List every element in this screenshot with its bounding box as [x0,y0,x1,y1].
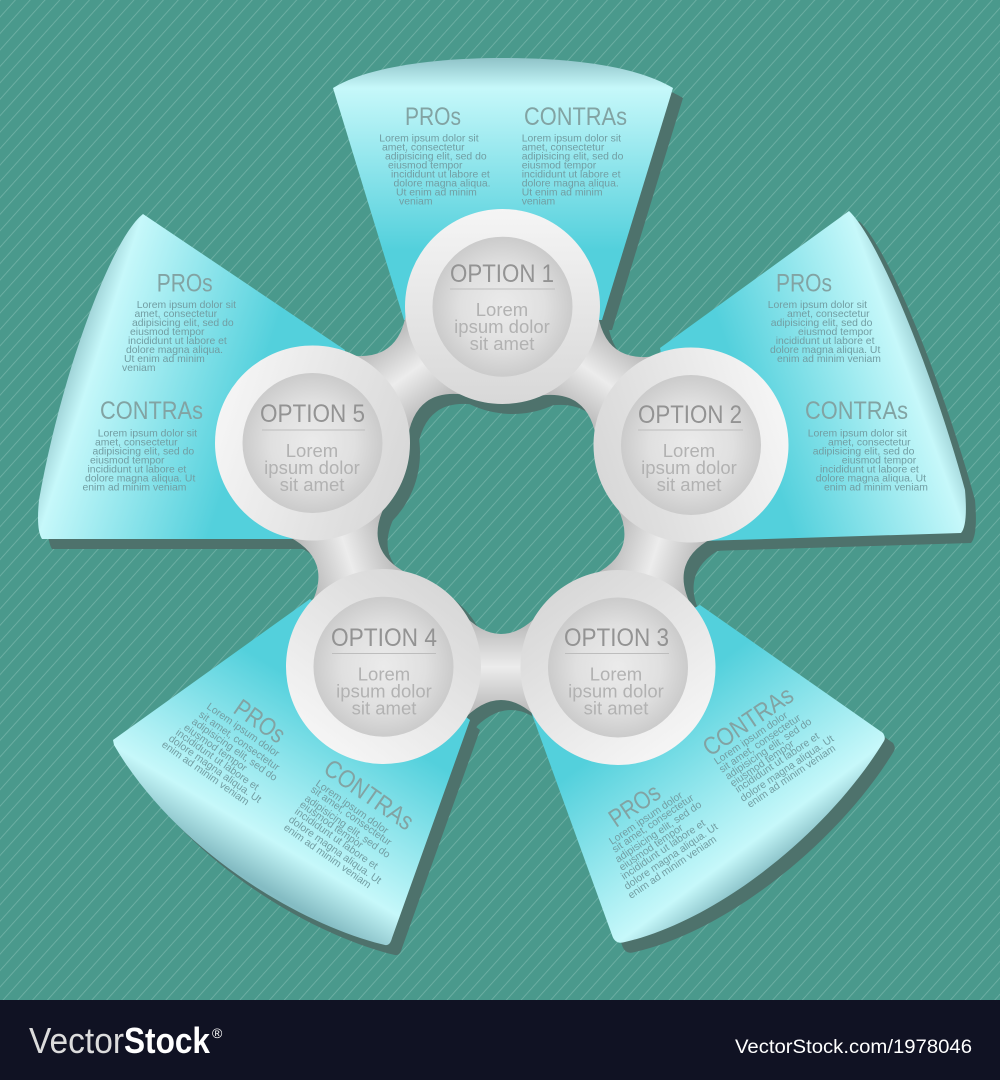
text: option 3 description: sit amet [584,698,648,718]
text: pros body [159,701,282,808]
footer bar [0,1000,1000,1080]
text: pros body: amet, consectetur [134,309,218,320]
text: contras body: enim ad minim veniam [281,822,373,891]
text: pros body: dolore magna aliqua. Ut [166,733,263,806]
text: contras body: veniam [522,197,555,208]
text: contras body: Lorem ipsum dolor sit [522,134,621,145]
text: pros body: incididunt ut labore et [173,727,261,793]
text: contras body: enim ad minim veniam [746,743,838,810]
text: contras body: eiusmod tempor [842,456,917,467]
panel: option 1 pros and contras [333,58,673,320]
text: contras body [808,429,928,494]
text: pros body: enim ad minim veniam [159,739,251,808]
text: pros body: adipisicing elit, sed do [132,318,234,329]
text: pros body [768,300,881,365]
text: pros body: incididunt ut labore et [776,336,875,347]
text: option 4 description: ipsum dolor [336,680,432,702]
text: option 4 description: sit amet [352,698,416,718]
text: contras body: enim ad minim veniam [824,483,928,494]
heading: contras: CONTRAs [698,681,799,762]
text: contras body: eiusmod tempor [90,456,165,467]
text: option 2 description: ipsum dolor [641,457,737,478]
text: contras body: dolore magna aliqua. Ut [739,734,836,804]
text: pros body: dolore magna aliqua. Ut [770,345,880,356]
text: contras body: dolore magna aliqua. Ut [85,474,195,485]
connectors between option circles [283,307,719,722]
text: pros body: Ut enim ad minim [396,188,477,199]
text: contras body: amet, consectetur [828,438,911,449]
text: option 5 description: Lorem [286,440,338,461]
text: contras body [281,778,394,891]
text: pros body: incididunt ut labore et [391,170,490,181]
heading: contras: CONTRAs [319,754,419,836]
text: contras body: dolore magna aliqua. [522,179,619,190]
heading: pros: PROs [405,103,461,131]
panel: option 4 pros and contras [113,599,470,945]
text: pros body [122,300,236,374]
text: contras body: dolore magna aliqua. Ut [286,814,383,887]
text: option 5 description: ipsum dolor [264,457,360,478]
text: contras body: adipisicing elit, sed do [724,716,814,782]
text: pros body: adipisicing elit, sed do [614,799,704,865]
text: pros body: enim ad minim veniam [627,834,719,901]
panel: option 2 pros and contras [660,211,966,541]
label: option 3: OPTION 3 [564,624,669,652]
text: pros body: adipisicing elit, sed do [385,152,487,163]
option 3 circle [482,531,754,804]
text: pros body: dolore magna aliqua. [394,179,491,190]
heading: contras: CONTRAs [524,103,627,131]
text: pros body: enim ad minim veniam [777,354,881,365]
heading: contras: CONTRAs [100,397,203,425]
option 4 circle [247,530,520,803]
text: option 4 description [336,664,432,718]
heading: contras: CONTRAs [805,397,908,425]
text: pros body: eiusmod tempor [388,161,463,172]
text: option 1 description: sit amet [470,333,534,354]
text: contras body: adipisicing elit, sed do [92,447,194,458]
label: option 4: OPTION 4 [331,624,437,652]
text: pros body: amet, consectetur [382,143,465,154]
label: option 5: OPTION 5 [260,400,365,428]
text: pros body: Lorem ipsum dolor sit [768,300,867,311]
text: contras body: dolore magna aliqua. Ut [816,474,926,485]
text: option 2 description: sit amet [657,474,721,495]
text: option 1 description [454,299,550,354]
text: option 3 description: Lorem [590,664,642,684]
text: pros body: eiusmod tempor [181,722,249,774]
text: contras body: incididunt ut labore et [522,170,621,181]
text: contras body [522,134,624,208]
drop shadows [48,68,976,955]
text: contras body: Lorem ipsum dolor [313,778,391,837]
text: contras body: Ut enim ad minim [522,188,603,199]
text: contras body: eiusmod tempor [729,738,797,789]
text: pros body: Lorem ipsum dolor [608,790,685,847]
text: option 1 description: ipsum dolor [454,316,550,337]
text: option 3 description: ipsum dolor [568,680,664,702]
text: pros body: sit amet, consectetur [196,709,282,774]
text: pros body: veniam [122,363,156,374]
panel: option 3 pros and contras [525,605,885,943]
image id: VectorStock.com/1978046 [735,1036,972,1058]
text: contras body: sit amet, consectetur [718,712,804,775]
text: option 4 description: Lorem [358,664,410,684]
text: option 3 description [568,664,664,718]
text: pros body: amet, consectetur [787,309,870,320]
text: option 5 description: sit amet [280,474,344,495]
logo: VectorStock: Vector [29,1020,124,1061]
text: contras body: incididunt ut labore et [820,465,919,476]
logo: VectorStock: Stock [124,1020,211,1061]
text: option 2 description [641,440,737,495]
text: pros body: Lorem ipsum dolor [204,701,282,760]
heading: pros: PROs [229,694,290,749]
text: pros body: adipisicing elit, sed do [189,716,279,784]
text: contras body [82,429,197,494]
text: contras body: incididunt ut labore et [88,465,186,476]
label: option 2: OPTION 2 [638,401,742,429]
text: contras body [713,710,838,810]
text: contras body: eiusmod tempor [522,161,597,172]
label: option 1: OPTION 1 [450,260,554,288]
text: contras body: adipisicing elit, sed do [522,152,624,163]
text: pros body: eiusmod tempor [130,327,205,338]
text: pros body: dolore magna aliqua. Ut [623,822,720,892]
text: pros body [608,790,720,901]
text: contras body: enim ad minim veniam [82,483,186,494]
text: pros body: dolore magna aliqua. [126,345,223,356]
text: pros body: eiusmod tempor [798,327,873,338]
text: contras body: eiusmod tempor [297,799,365,851]
text: contras body: incididunt ut labore et [734,731,822,795]
text: pros body: Lorem ipsum dolor sit [137,300,236,311]
text: pros body: veniam [399,197,432,208]
heading: pros: PROs [604,778,666,833]
text: contras body: amet, consectetur [522,143,605,154]
text: contras body: Lorem ipsum dolor sit [808,429,907,440]
text: pros body: incididunt ut labore et [620,818,708,882]
text: contras body: Lorem ipsum dolor sit [98,429,197,440]
text: pros body [379,134,491,208]
option 1 circle [405,209,600,404]
text: contras body: adipisicing elit, sed do [302,793,392,861]
text: option 5 description [264,440,360,495]
logo: VectorStock [29,1020,223,1061]
heading: pros: PROs [157,270,213,298]
panel: option 5 pros and contras [38,214,345,539]
text: contras body: Lorem ipsum dolor [713,710,790,767]
text: contras body: amet, consectetur [95,438,178,449]
text: option 2 description: Lorem [663,440,715,461]
text: contras body: adipisicing elit, sed do [813,447,915,458]
text: pros body: eiusmod tempor [618,822,686,873]
text: contras body: sit amet, consectetur [308,784,394,849]
logo: VectorStock: ® [212,1025,223,1041]
text: pros body: Ut enim ad minim [124,354,205,365]
text: pros body: sit amet, consectetur [611,792,697,855]
option 5 circle [190,320,435,566]
text: contras body: incididunt ut labore et [292,806,380,872]
text: pros body: adipisicing elit, sed do [771,318,873,329]
option 2 circle [568,322,814,568]
heading: pros: PROs [776,270,832,298]
text: option 1 description: Lorem [476,299,528,320]
text: pros body: Lorem ipsum dolor sit [379,134,479,145]
text: pros body: incididunt ut labore et [128,336,227,347]
